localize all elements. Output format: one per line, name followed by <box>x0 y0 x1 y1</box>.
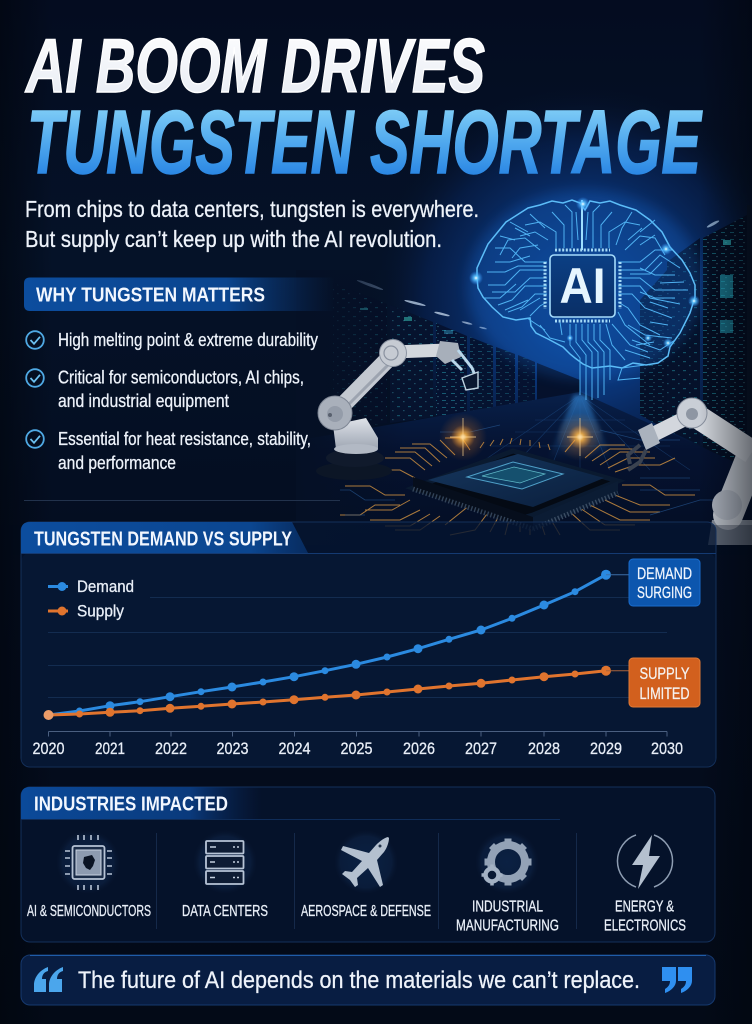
axis: 2024 <box>278 739 310 758</box>
industry: data centers <box>182 830 268 920</box>
callout: supply limited <box>606 658 700 707</box>
subtitle: But supply can’t keep up with the AI revolution. <box>25 226 442 252</box>
axis: 2028 <box>528 739 560 758</box>
quote text: The future of AI depends on the materials we can’t replace. <box>78 967 640 994</box>
industry: industrial manufacturing: MANUFACTURING <box>456 918 559 934</box>
AI chip <box>550 255 615 317</box>
industry: data centers: DATA CENTERS <box>182 903 268 920</box>
icon: airplane <box>334 830 398 894</box>
industry: industrial manufacturing: INDUSTRIAL <box>472 898 543 916</box>
hero illustration: data center with AI brain and robots <box>0 80 752 555</box>
industry: AI & semiconductors: AI & SEMICONDUCTORS <box>27 903 151 920</box>
axis: 2027 <box>465 739 497 758</box>
callout: demand surging <box>606 559 700 606</box>
icon: closing quote mark <box>662 967 692 993</box>
supply line <box>44 666 611 720</box>
axis: 2021 <box>95 739 125 758</box>
AI brain hologram <box>467 190 703 400</box>
server racks: left corridor <box>333 279 580 430</box>
central processor chip <box>413 451 618 530</box>
legend: Supply <box>77 602 124 620</box>
bullet: semiconductors: and industrial equipment <box>58 391 229 411</box>
heading: demand vs supply: TUNGSTEN DEMAND VS SUPPLY <box>34 528 293 550</box>
demand line <box>48 570 611 715</box>
heading: demand vs supply <box>21 522 716 554</box>
brain outline <box>477 200 695 368</box>
icon: processor <box>56 830 120 894</box>
chip pins <box>545 250 620 321</box>
axis <box>32 732 683 758</box>
industry: energy & electronics: ELECTRONICS <box>604 918 686 934</box>
bullet: heat resistance: and performance <box>58 453 176 473</box>
legend: Demand <box>77 577 134 596</box>
icon: server stack <box>193 830 257 894</box>
bullet: heat resistance: Essential for heat resistance, stability, <box>58 429 311 449</box>
industry: energy & electronics: ENERGY & <box>615 898 674 916</box>
golden circuit traces <box>340 438 695 535</box>
title line 1: AI BOOM DRIVES <box>25 24 485 109</box>
title <box>25 24 703 193</box>
industry: aerospace & defense: AEROSPACE & DEFENSE <box>301 903 431 920</box>
industry: industrial manufacturing <box>456 830 559 934</box>
industry: aerospace & defense <box>301 830 431 920</box>
panel: industries impacted <box>21 787 715 942</box>
axis: 2030 <box>651 739 683 758</box>
bullet: semiconductors <box>26 368 304 411</box>
AI chip: AI <box>560 258 606 314</box>
icon: gears <box>475 830 539 894</box>
robot arm: right <box>628 398 752 545</box>
heading: industries impacted <box>21 787 560 820</box>
callout: supply limited: SUPPLY <box>640 664 690 683</box>
callout: demand surging: DEMAND <box>637 564 692 583</box>
legend <box>48 577 134 620</box>
heading: industries impacted: INDUSTRIES IMPACTED <box>34 794 228 816</box>
icon: lightning bolt <box>617 835 673 889</box>
subtitle <box>25 196 479 252</box>
axis: 2025 <box>340 739 372 758</box>
axis: 2026 <box>403 739 435 758</box>
subtitle: From chips to data centers, tungsten is everywhere. <box>25 196 479 222</box>
axis: 2029 <box>590 739 622 758</box>
axis: 2020 <box>32 739 64 758</box>
server racks: right wall <box>640 205 752 475</box>
panel: why tungsten matters <box>24 278 340 500</box>
axis: 2023 <box>216 739 248 758</box>
callout: demand surging: SURGING <box>637 583 692 602</box>
industry: AI & semiconductors <box>27 830 151 920</box>
bullet: heat resistance <box>26 429 311 473</box>
heading: why tungsten matters <box>24 278 335 311</box>
robot arm: left <box>316 340 478 480</box>
axis: 2022 <box>155 739 187 758</box>
callout: supply limited: LIMITED <box>640 684 690 703</box>
panel: closing quote <box>21 955 715 1005</box>
sparks <box>439 413 604 461</box>
bullet: semiconductors: Critical for semiconductors, AI chips, <box>58 368 304 388</box>
icon: opening quote mark <box>34 967 63 992</box>
industry: energy & electronics <box>604 835 686 934</box>
floor <box>300 392 752 540</box>
panel: demand vs supply chart <box>21 522 716 767</box>
bullet: melting point: High melting point & extreme durability <box>58 330 318 350</box>
heading: why tungsten matters: WHY TUNGSTEN MATTERS <box>36 284 265 306</box>
